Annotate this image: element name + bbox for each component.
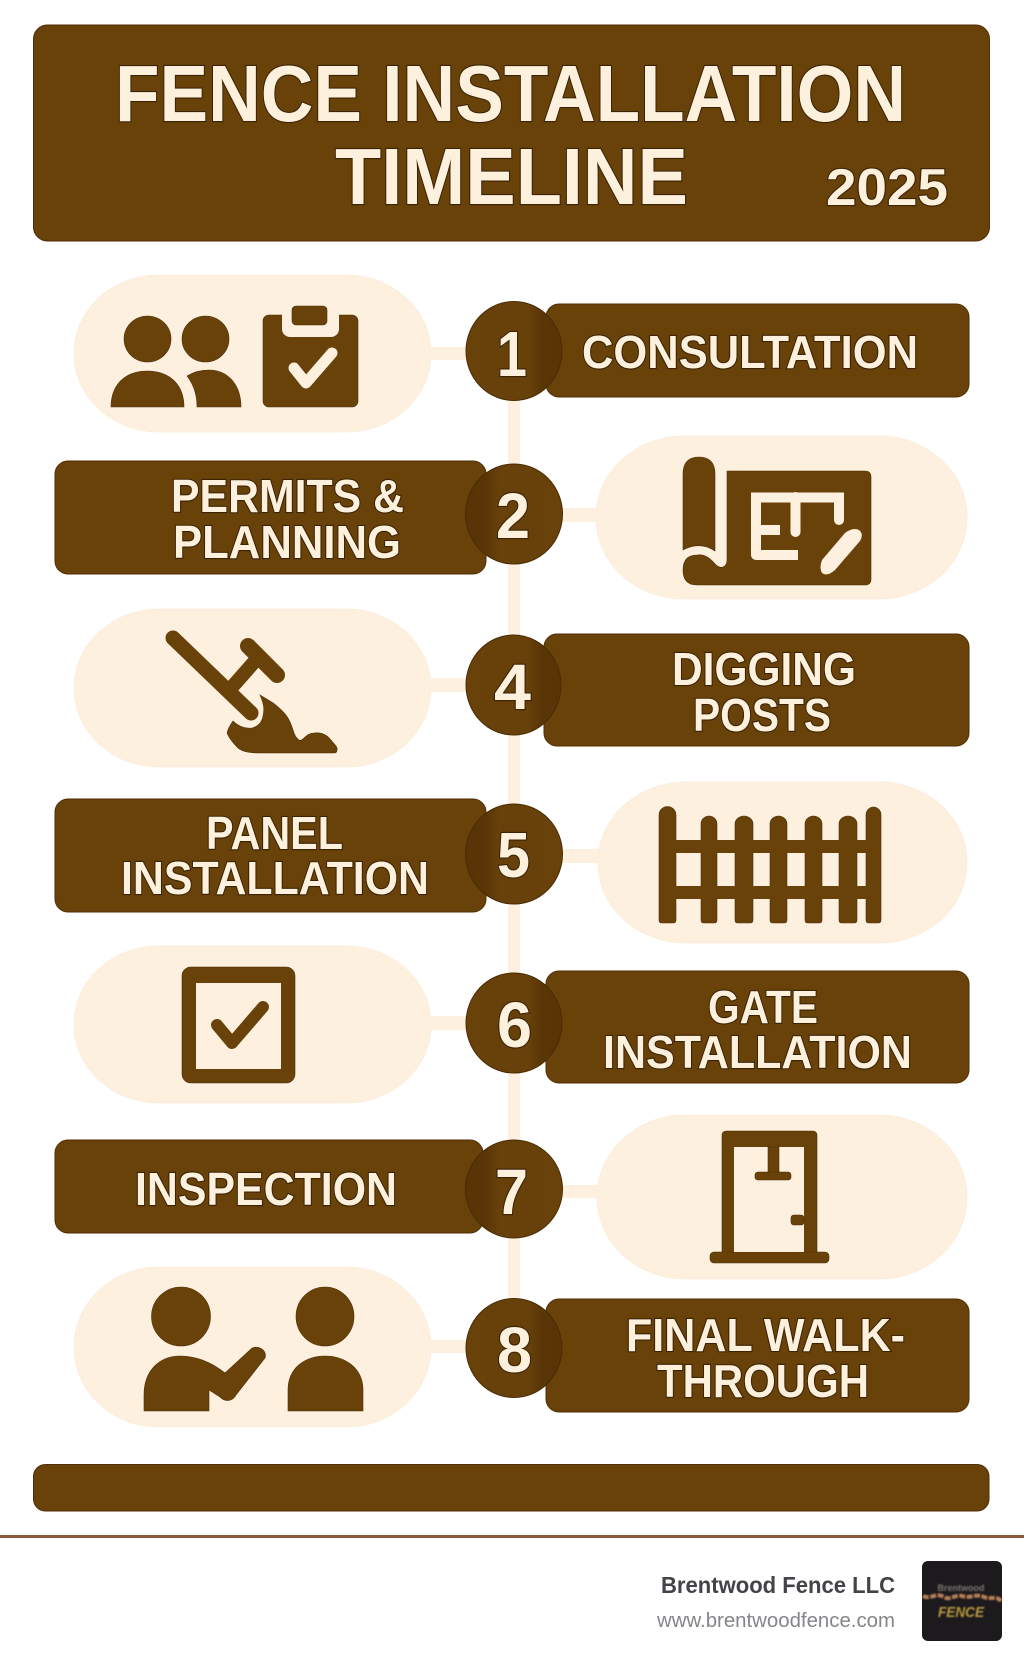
icon panel: shovel [74,609,431,767]
footer logo: FENCE [938,1604,985,1621]
step 7: inspection [55,1115,967,1279]
label bar: panel installation: INSTALLATION [121,852,429,904]
number 6 [466,973,562,1073]
footer brand text: www.brentwoodfence.com [656,1609,895,1632]
bottom banner [34,1464,989,1511]
number 7: 7 [495,1156,528,1228]
icon panel: blueprint [596,436,967,599]
label bar: permits: PLANNING [173,516,401,568]
number 1 [466,302,562,400]
label bar: digging posts [544,634,969,746]
label bar: consultation: CONSULTATION [582,326,918,378]
step 5: panel installation [55,782,967,943]
label bar: panel installation: PANEL [206,807,343,859]
number 6: 6 [497,989,532,1061]
icon panel: gate door [597,1115,967,1279]
icon panel: fence [598,782,967,943]
label bar: permits [55,461,486,574]
number 4 [466,635,561,735]
label bar: inspection [55,1140,483,1233]
connector [431,678,469,692]
title text [115,49,906,221]
label bar: gate installation [546,971,969,1083]
label bar: final walk-through [546,1299,969,1412]
connector [560,508,598,522]
icon panel: consultation [74,275,431,432]
label bar: digging posts: POSTS [693,689,831,741]
number 8: 8 [497,1314,532,1386]
connector [431,1340,469,1353]
label bar: final walk-through: FINAL WALK- [626,1309,905,1361]
number 5: 5 [497,819,530,891]
year label: 2025 [826,159,948,217]
label bar: gate installation: INSTALLATION [603,1026,912,1078]
number 2 [466,464,562,564]
label bar: final walk-through: THROUGH [657,1355,869,1407]
step 8: final walk-through [74,1267,969,1427]
title text: TIMELINE [335,132,688,221]
footer logo [922,1561,1002,1641]
step 1: consultation [74,275,969,432]
connector [431,1016,469,1030]
step 2: permits and planning [55,436,967,599]
number 4: 4 [494,651,531,723]
footer brand text [656,1572,895,1632]
label bar: panel installation [55,799,486,912]
step 6: gate installation [74,946,969,1103]
connector [560,849,600,863]
number 2: 2 [496,480,530,552]
label bar: digging posts: DIGGING [672,643,856,695]
title banner [34,25,990,241]
label bar: consultation [546,304,969,397]
number 7 [466,1140,562,1238]
number 5 [466,804,562,904]
connector [431,347,469,360]
label bar: inspection: INSPECTION [135,1163,397,1215]
number 1: 1 [497,318,527,390]
label bar: permits: PERMITS & [171,470,404,522]
icon panel: two people [74,1267,431,1427]
footer brand text: Brentwood Fence LLC [661,1572,895,1598]
footer rule [0,1535,1024,1538]
label bar: gate installation: GATE [708,981,818,1033]
number 8 [466,1298,562,1398]
step 4: digging posts [74,609,969,767]
timeline spine [508,380,520,1320]
icon panel: checkbox [74,946,431,1103]
footer logo: Brentwood [938,1583,984,1593]
connector [560,1185,598,1198]
title text: FENCE INSTALLATION [115,49,906,138]
